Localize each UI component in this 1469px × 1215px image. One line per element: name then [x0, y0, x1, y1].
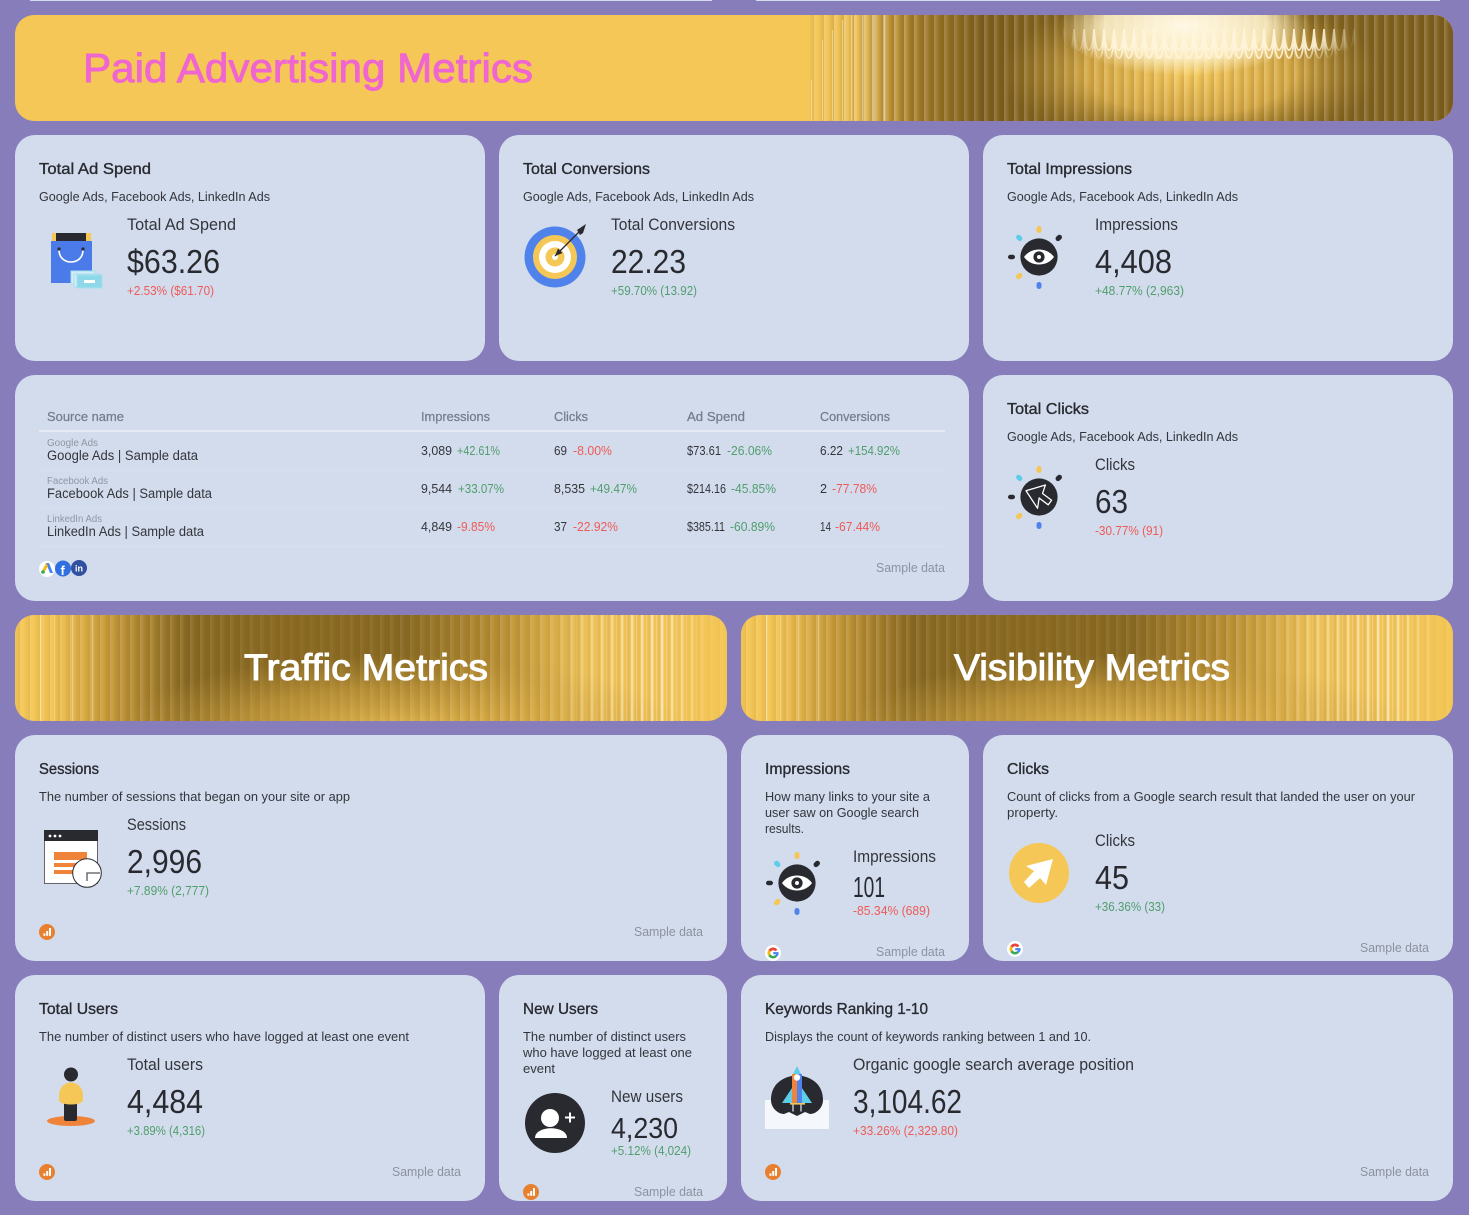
icon: browser window with clock: [44, 830, 101, 887]
icon: rocket launch: [765, 1066, 829, 1129]
table row: Google Ads: +42.61%: [457, 443, 500, 458]
panel: Total Ad Spend: [15, 135, 485, 361]
panel: Total Users: The number of distinct users who have logged at least one event: [39, 1029, 409, 1044]
title: Paid Advertising Metrics: Paid Advertising Metrics: [83, 45, 533, 91]
table row: LinkedIn Ads: -9.85%: [457, 519, 495, 534]
table row: Google Ads: Google Ads | Sample data: [47, 448, 198, 463]
icon: analytics: [523, 1184, 539, 1200]
panel: Keywords Ranking 1-10: Organic google search average position: [853, 1056, 1134, 1074]
icon: analytics: [39, 924, 55, 940]
panel: Impressions: Impressions: [765, 761, 850, 778]
icon: target with arrow: [524, 224, 586, 288]
table row: LinkedIn Ads: LinkedIn Ads: [47, 514, 102, 525]
panel: Total Users: +3.89% (4,316): [127, 1123, 205, 1138]
table row: Facebook Ads: +33.07%: [458, 481, 504, 496]
panel: Total Ad Spend: +2.53% ($61.70): [127, 283, 214, 298]
panel: Impressions: results.: [765, 821, 804, 836]
table row: LinkedIn Ads: -67.44%: [835, 519, 880, 534]
icon: Google: [1007, 941, 1023, 957]
panel: Clicks: Count of clicks from a Google search result that landed the user on your: [1007, 789, 1416, 804]
panel: Impressions: 101: [853, 872, 885, 904]
panel: Clicks: property.: [1007, 805, 1058, 820]
panel: New Users: Sample data: [634, 1184, 704, 1199]
table header: Impressions: [421, 409, 490, 424]
table row: LinkedIn Ads: 4,849: [421, 520, 452, 534]
panel: Total Impressions: Impressions: [1095, 216, 1178, 234]
panel: Keywords Ranking 1-10: Keywords Ranking 1-10: [765, 1001, 928, 1018]
panel: Total Users: 4,484: [127, 1083, 203, 1120]
panel: Sessions: Sample data: [634, 924, 704, 939]
table row: Facebook Ads: 8,535: [554, 482, 585, 496]
panel: Total Conversions: Google Ads, Facebook Ads, LinkedIn Ads: [523, 189, 754, 204]
panel: Total Users: Total Users: [39, 1001, 118, 1018]
table row: Facebook Ads: -45.85%: [731, 481, 776, 496]
table row: LinkedIn Ads: LinkedIn Ads | Sample data: [47, 524, 204, 539]
panel: Total Ad Spend: Total Ad Spend: [39, 161, 151, 178]
panel: Total Conversions: 22.23: [611, 243, 686, 280]
panel: Sessions: Sessions: [127, 816, 186, 834]
table header: Conversions: [820, 409, 890, 424]
panel: Keywords Ranking 1-10: Displays the count of keywords ranking between 1 and 10.: [765, 1029, 1091, 1044]
icon: arrow in yellow circle: [1009, 843, 1069, 903]
table row: Google Ads: 6.22: [820, 444, 843, 458]
panel: Total Impressions: Total Impressions: [1007, 161, 1132, 178]
panel: Total Impressions: 4,408: [1095, 243, 1172, 280]
table row: Google Ads: [47, 438, 900, 463]
banner: Traffic Metrics: [15, 615, 727, 815]
table row: Facebook Ads: Facebook Ads | Sample data: [47, 486, 212, 501]
panel: Total Ad Spend: Total Ad Spend: [127, 216, 236, 234]
table row: LinkedIn Ads: [47, 514, 880, 539]
table row: LinkedIn Ads: 14: [820, 520, 831, 534]
table row: Facebook Ads: [47, 476, 877, 501]
table row: Google Ads: +154.92%: [848, 443, 900, 458]
panel: New Users: 4,230: [611, 1113, 678, 1145]
panel: Total Clicks: Google Ads, Facebook Ads, LinkedIn Ads: [1007, 429, 1238, 444]
panel: Total Conversions: Total Conversions: [523, 161, 650, 178]
panel: Impressions: Sample data: [876, 944, 946, 959]
panel: Total Conversions: [499, 135, 969, 361]
table row: Facebook Ads: 2: [820, 482, 827, 496]
panel: source table: [15, 375, 969, 601]
panel: Keywords Ranking 1-10: 3,104.62: [853, 1083, 962, 1120]
icon: eye: [1008, 226, 1063, 289]
table header: Clicks: [554, 409, 588, 424]
icons: ad source logos: [39, 560, 87, 578]
table row: Google Ads: $73.61: [687, 444, 721, 458]
icon: eye: [766, 852, 821, 915]
table row: Google Ads: -8.00%: [573, 443, 612, 458]
panel: Impressions: user saw on Google search: [765, 805, 919, 820]
table row: Facebook Ads: +49.47%: [590, 481, 637, 496]
icon: add user: [525, 1093, 585, 1153]
panel: New Users: [499, 975, 727, 1201]
panel: Total Users: [15, 975, 485, 1201]
panel: New Users: event: [523, 1061, 555, 1076]
panel: Total Conversions: Total Conversions: [611, 216, 735, 234]
table row: LinkedIn Ads: $385.11: [687, 520, 725, 534]
table row: Facebook Ads: Facebook Ads: [47, 476, 108, 487]
table row: Google Ads: 69: [554, 444, 567, 458]
panel: Total Clicks: Clicks: [1095, 456, 1135, 474]
panel: Total Impressions: +48.77% (2,963): [1095, 283, 1184, 298]
panel: Total Clicks: Total Clicks: [1007, 401, 1089, 418]
table row: Facebook Ads: $214.16: [687, 482, 726, 496]
panel: Keywords Ranking 1-10: Sample data: [1360, 1164, 1430, 1179]
table row: Facebook Ads: 9,544: [421, 482, 452, 496]
panel: Keywords Ranking 1-10: [741, 975, 1453, 1201]
icon: person on orange disc: [47, 1068, 95, 1126]
banner: Visibility Metrics: [741, 615, 1453, 815]
table header: Ad Spend: [687, 409, 745, 424]
panel: Total Impressions: [983, 135, 1453, 361]
panel: Clicks: Clicks: [1007, 761, 1049, 778]
table header: [47, 409, 890, 424]
panel: New Users: The number of distinct users: [523, 1029, 686, 1044]
panel: Sessions: Sessions: [39, 761, 99, 778]
table row: Google Ads: Google Ads: [47, 438, 98, 449]
icon: analytics: [39, 1164, 55, 1180]
panel: Total Clicks: -30.77% (91): [1095, 523, 1163, 538]
table row: LinkedIn Ads: -22.92%: [573, 519, 618, 534]
table row: Google Ads: 3,089: [421, 444, 452, 458]
panel: Keywords Ranking 1-10: +33.26% (2,329.80): [853, 1123, 958, 1138]
table header: Source name: [47, 409, 124, 424]
panel: Impressions: Impressions: [853, 848, 936, 866]
panel: Total Conversions: +59.70% (13.92): [611, 283, 697, 298]
icon: shopping bag with tickets: [51, 233, 102, 288]
table row: LinkedIn Ads: 37: [554, 520, 567, 534]
panel: Total Clicks: 63: [1095, 483, 1128, 520]
table row: LinkedIn Ads: -60.89%: [730, 519, 775, 534]
panel: New Users: New users: [611, 1088, 683, 1106]
panel: Total Users: Total users: [127, 1056, 203, 1074]
panel: New Users: who have logged at least one: [522, 1045, 692, 1060]
panel: Total Ad Spend: $63.26: [127, 243, 220, 280]
icons: ad source logos: f: [60, 563, 66, 578]
banner: Paid Advertising Metrics: [15, 15, 1453, 121]
panel: Sessions: The number of sessions that began on your site or app: [39, 789, 350, 804]
icon: analytics: [765, 1164, 781, 1180]
panel: New Users: New Users: [523, 1001, 598, 1018]
panel: source table: Sample data: [876, 560, 946, 575]
panel: Impressions: [741, 735, 969, 961]
panel: Clicks: Clicks: [1095, 832, 1135, 850]
heading: Traffic Metrics: Traffic Metrics: [244, 647, 488, 688]
panel: Clicks: Sample data: [1360, 940, 1430, 955]
panel: Total Impressions: Google Ads, Facebook Ads, LinkedIn Ads: [1007, 189, 1238, 204]
panel: New Users: +5.12% (4,024): [611, 1143, 691, 1158]
table row: Google Ads: -26.06%: [727, 443, 772, 458]
panel: Impressions: How many links to your site a: [765, 789, 931, 804]
icon: cursor: [1008, 466, 1063, 529]
icons: ad source logos: in: [75, 564, 83, 574]
table row: Facebook Ads: -77.78%: [832, 481, 877, 496]
panel: Total Users: Sample data: [392, 1164, 462, 1179]
icon: Google: [765, 945, 781, 961]
panel: Impressions: -85.34% (689): [853, 903, 930, 918]
heading: Visibility Metrics: Visibility Metrics: [954, 647, 1230, 688]
panel: Total Ad Spend: Google Ads, Facebook Ads, LinkedIn Ads: [39, 189, 270, 204]
panel: Clicks: 45: [1095, 859, 1129, 896]
panel: Total Clicks: [983, 375, 1453, 601]
panel: Sessions: +7.89% (2,777): [127, 883, 209, 898]
panel: Sessions: [15, 735, 727, 961]
panel: Sessions: 2,996: [127, 843, 202, 880]
panel: Clicks: +36.36% (33): [1095, 899, 1165, 914]
panel: Clicks: [983, 735, 1453, 961]
